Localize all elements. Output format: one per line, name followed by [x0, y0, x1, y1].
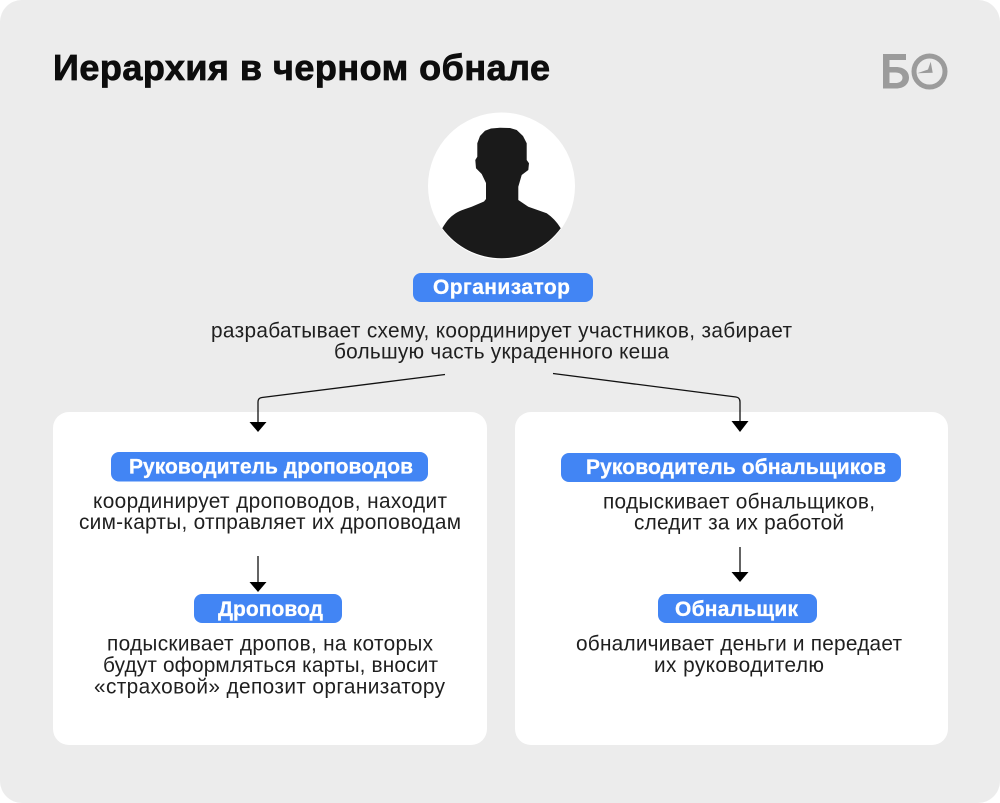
- dropovod description: подыскивает дропов, на которых: [107, 632, 434, 656]
- label: casher: [658, 594, 817, 623]
- arrow: organizer to cashers manager: [553, 374, 748, 432]
- cashers manager description: следит за их работой: [634, 512, 844, 534]
- dropovod description: «страховой» депозит организатору: [94, 676, 446, 698]
- label: drop manager: [111, 452, 428, 482]
- arrow: organizer to drop managers: [250, 374, 445, 432]
- organizer description: большую часть украденного кеша: [334, 340, 669, 364]
- label: casher: Обнальщик: [675, 598, 798, 621]
- logo: [883, 54, 945, 88]
- drop manager description: сим-карты, отправляет их дроповодам: [79, 511, 461, 534]
- panel: left card: [53, 412, 487, 745]
- casher description: обналичивает деньги и передает: [576, 632, 902, 656]
- casher description: их руководителю: [654, 654, 824, 677]
- label: drop manager: Руководитель дроповодов: [129, 455, 413, 478]
- label: dropovod: [194, 594, 342, 623]
- label: organizer: Организатор: [433, 276, 570, 299]
- cashers manager description: [603, 490, 875, 534]
- arrow: drop manager to dropovod: [250, 556, 266, 592]
- casher description: [576, 632, 902, 677]
- cashers manager description: подыскивает обнальщиков,: [603, 490, 875, 514]
- dropovod description: [94, 632, 446, 698]
- label: organizer: [413, 273, 593, 302]
- organizer portrait: [428, 112, 575, 260]
- drop manager description: [79, 490, 461, 534]
- drop manager description: координирует дроповодов, находит: [93, 490, 447, 513]
- arrow: cashers manager to casher: [732, 547, 748, 582]
- label: cashers manager: Руководитель обнальщиков: [586, 456, 886, 479]
- title: Иерархия в черном обнале: [53, 47, 550, 88]
- panel: right card: [515, 412, 948, 745]
- organizer description: разрабатывает схему, координирует участников, забирает: [211, 320, 792, 342]
- dropovod description: будут оформляться карты, вносит: [103, 654, 438, 677]
- organizer description: [211, 320, 792, 364]
- label: dropovod: Дроповод: [218, 598, 323, 621]
- label: cashers manager: [561, 453, 901, 482]
